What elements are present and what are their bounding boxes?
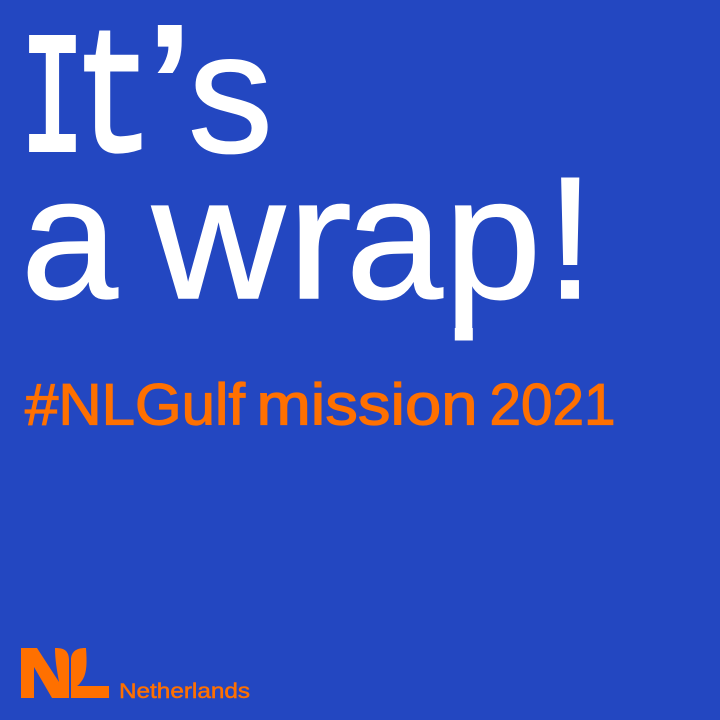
subheading: #NLGulf mission 2021: 2021 (490, 372, 616, 438)
subheading: #NLGulf mission 2021 (25, 372, 616, 438)
heading: It's: t (74, 3, 154, 203)
heading: a wrap!: a (346, 140, 443, 335)
heading: It's: s (188, 0, 273, 189)
wordmark: Netherlands: Netherlands (119, 680, 250, 703)
subheading: #NLGulf mission 2021: #NLGulf (25, 372, 246, 438)
heading: It's: I (20, 8, 85, 202)
logo: NL Netherlands (21, 648, 250, 703)
heading: a wrap! (21, 140, 594, 340)
heading: It's (20, 0, 273, 203)
icon: NL monogram (21, 648, 109, 698)
heading: a wrap!: a (21, 140, 118, 335)
heading: a wrap!: ! (546, 140, 594, 335)
heading: a wrap!: w (151, 140, 286, 335)
heading: a wrap!: r (287, 140, 352, 335)
subheading: #NLGulf mission 2021: mission (256, 372, 478, 438)
heading: a wrap!: p (444, 140, 541, 335)
